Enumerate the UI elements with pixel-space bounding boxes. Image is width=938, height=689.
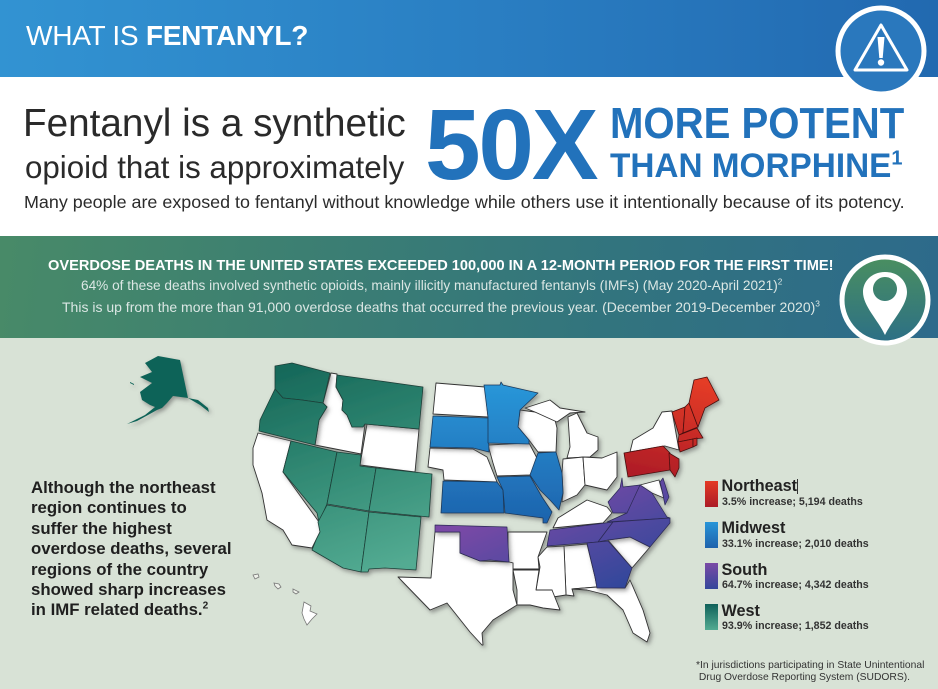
text: fentanyl definition bbox=[23, 102, 406, 185]
text: fentanyl definition: opioid that is approximately bbox=[25, 150, 404, 185]
legend item: West: West bbox=[722, 602, 760, 620]
title: WHAT IS FENTANYL? bbox=[26, 20, 308, 51]
footnote: Drug Overdose Reporting System (SUDORS). bbox=[699, 672, 910, 682]
icon: location pin badge bbox=[840, 254, 930, 346]
legend item: West bbox=[705, 602, 869, 632]
text: northeast callout: suffer the highest bbox=[31, 519, 172, 538]
heading: overdose deaths: OVERDOSE DEATHS IN THE UNITED STATES EXCEEDED 100,000 IN A 12-MONTH PERIOD FOR THE FIRST TIME! bbox=[48, 258, 833, 274]
map: white states bbox=[253, 373, 679, 645]
text: fentanyl definition: Fentanyl is a synthetic bbox=[23, 102, 406, 145]
legend item: Northeast bbox=[705, 477, 863, 508]
map: West region bbox=[259, 363, 432, 572]
stat: 50X: 50X bbox=[425, 89, 596, 201]
legend item: South bbox=[705, 561, 869, 591]
header band bbox=[0, 0, 938, 77]
map: Northeast region bbox=[624, 377, 719, 477]
footnote: *In jurisdictions participating in State Unintentional bbox=[696, 660, 924, 671]
map: Midwest region bbox=[430, 382, 563, 523]
legend bbox=[705, 477, 869, 632]
text: northeast callout: Although the northeast bbox=[31, 478, 216, 497]
legend item: Midwest bbox=[705, 519, 869, 550]
legend item: Midwest: Midwest bbox=[722, 519, 785, 537]
text: northeast callout bbox=[31, 478, 232, 619]
text: previous year: This is up from the more than 91,000 overdose deaths that occurred the previous year. (December 2019-December 2020)3 bbox=[62, 298, 820, 315]
legend item: West: 93.9% increase; 1,852 deaths bbox=[722, 620, 869, 632]
text: northeast callout: region continues to bbox=[31, 498, 187, 517]
legend item: Northeast: Northeast bbox=[722, 477, 797, 495]
text: more potent than morphine: THAN MORPHINE1 bbox=[610, 147, 902, 185]
legend item: Midwest: 33.1% increase; 2,010 deaths bbox=[722, 538, 869, 550]
legend item: Northeast: 3.5% increase; 5,194 deaths bbox=[722, 496, 863, 508]
text: more potent than morphine bbox=[610, 99, 904, 185]
legend item: South: South bbox=[722, 561, 767, 579]
text: northeast callout: overdose deaths, several bbox=[31, 539, 232, 558]
text: more potent than morphine: MORE POTENT bbox=[610, 99, 904, 148]
map: Hawaii bbox=[253, 574, 317, 625]
text: northeast callout: regions of the country bbox=[31, 560, 208, 579]
legend item: South: 64.7% increase; 4,342 deaths bbox=[722, 579, 869, 591]
panel: potency statement bbox=[0, 77, 938, 236]
map: Alaska bbox=[127, 356, 209, 424]
map: South region bbox=[435, 478, 670, 588]
footnote bbox=[696, 660, 924, 682]
text: exposure note: Many people are exposed to fentanyl without knowledge while others use it intentionally because of its potency. bbox=[24, 192, 905, 212]
icon: warning badge bbox=[836, 6, 926, 92]
text: share of deaths: 64% of these deaths involved synthetic opioids, mainly illicitly manufactured fentanyls (IMFs) (May 2020-April 2021)2 bbox=[81, 277, 782, 293]
panel: overdose deaths band bbox=[0, 236, 938, 338]
text: northeast callout: in IMF related deaths.2 bbox=[31, 600, 208, 619]
text: northeast callout: showed sharp increases bbox=[31, 580, 226, 599]
